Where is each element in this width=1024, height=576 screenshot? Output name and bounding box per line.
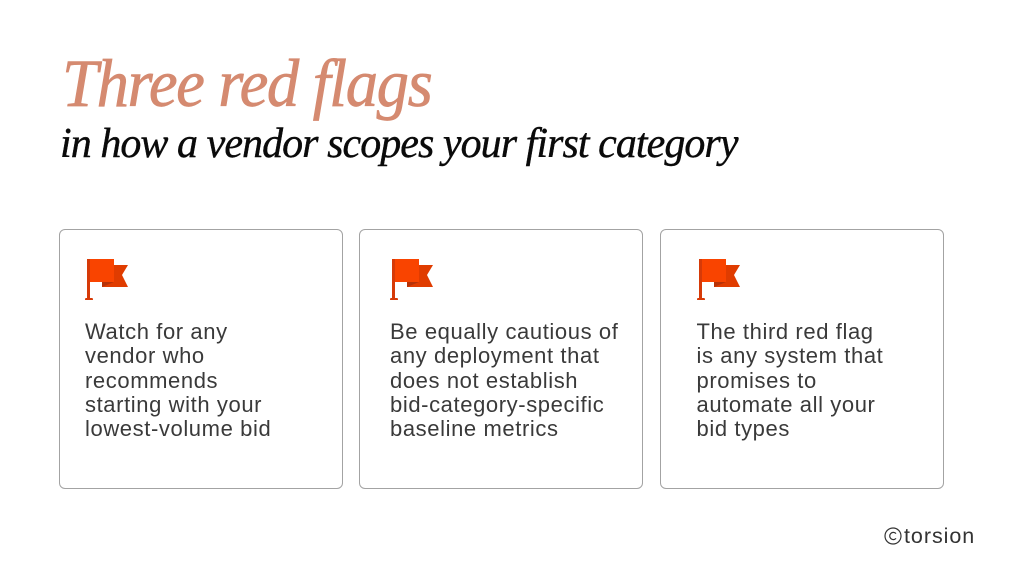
text: second flag: baseline metrics (390, 416, 559, 441)
text: second flag (390, 319, 618, 441)
text: first flag: starting with your (85, 392, 262, 417)
icon: red flag (697, 259, 740, 300)
logo: torsion (884, 524, 975, 548)
icon: red flag (390, 259, 433, 300)
text: first flag (85, 319, 271, 441)
panel: second red flag (359, 229, 643, 489)
text: second flag: bid-category-specific (390, 392, 604, 417)
icon: red flag (85, 259, 128, 300)
text: third flag: is any system that (696, 343, 883, 368)
text: first flag: lowest-volume bid (85, 416, 271, 441)
panel: first red flag (59, 229, 343, 489)
text: second flag: any deployment that (390, 343, 600, 368)
subtitle: in how a vendor scopes your first category (60, 121, 738, 167)
text: third flag: promises to (696, 368, 817, 392)
panel: third red flag (660, 229, 944, 489)
text: second flag: Be equally cautious of (390, 319, 618, 344)
icon: copyright mark (884, 527, 902, 545)
text: first flag: Watch for any (85, 319, 228, 344)
wordmark: torsion (904, 524, 975, 548)
text: first flag: vendor who (85, 343, 205, 368)
text: first flag: recommends (85, 368, 218, 392)
text: second flag: does not establish (390, 368, 578, 392)
text: third flag (696, 319, 883, 441)
text: third flag: automate all your (696, 392, 875, 417)
title: Three red flags: Three red flags (62, 45, 431, 121)
text: third flag: bid types (696, 416, 790, 441)
text: third flag: The third red flag (696, 319, 874, 344)
